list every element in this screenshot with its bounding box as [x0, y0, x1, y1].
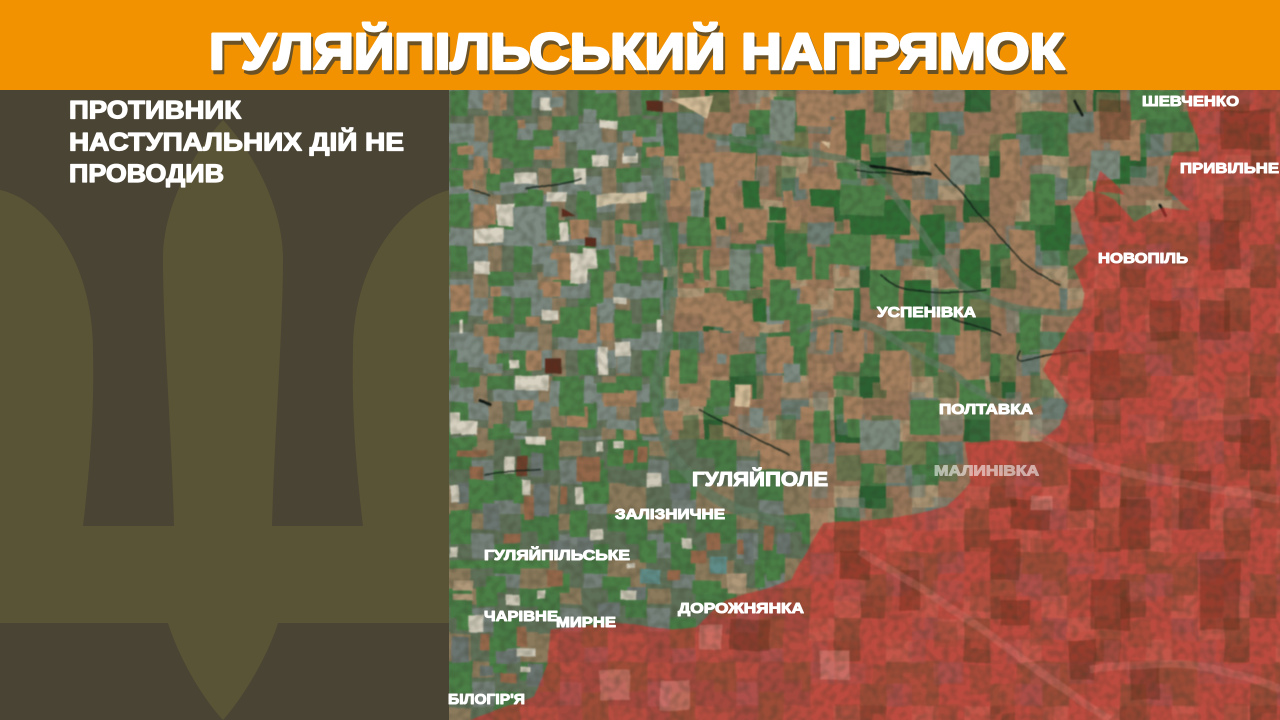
map labels: УСПЕНІВКА: [877, 304, 976, 321]
fields: upper-left base: [449, 90, 664, 442]
map labels: ГУЛЯЙПІЛЬСЬКЕ: [484, 546, 630, 564]
map labels: БІЛОГІР'Я: [448, 691, 525, 708]
map labels: ШЕВЧЕНКО: [1142, 93, 1239, 110]
map labels: ЗАЛІЗНИЧНЕ: [615, 506, 725, 523]
rivers and ravines: [470, 100, 1165, 525]
text: situation summary: ПРОТИВНИК: [69, 96, 242, 124]
text: situation summary: ПРОВОДИВ: [69, 160, 224, 188]
map labels: ДОРОЖНЯНКА: [678, 600, 804, 617]
map labels: ЧАРІВНЕ: [484, 608, 558, 625]
map labels: НОВОПІЛЬ: [1098, 250, 1188, 267]
header bar: [0, 0, 1280, 90]
fields: right-of-centre block: [730, 90, 1180, 470]
fields: lower-left mosaic: [450, 440, 790, 693]
icon: trident emblem: [0, 120, 450, 720]
map labels: МИРНЕ: [556, 614, 616, 631]
zone: red occupied territory: [440, 60, 1280, 720]
map: satellite view: [425, 60, 1280, 720]
map labels: МАЛИНІВКА: [934, 462, 1039, 480]
map labels: [448, 93, 1279, 708]
red zone field tones: [600, 100, 1280, 720]
map labels: ГУЛЯЙПОЛЕ: [692, 467, 828, 491]
title: ГУЛЯЙПІЛЬСЬКИЙ НАПРЯМОК: [209, 22, 1065, 80]
text: situation summary: НАСТУПАЛЬНИХ ДІЙ НЕ: [69, 126, 404, 156]
fields: upper-left mosaic: [450, 93, 663, 447]
fields: lower-left base: [430, 440, 810, 720]
panel: left background: [0, 90, 450, 720]
fields: upper-centre mosaic: [663, 93, 870, 450]
text: situation summary: [69, 96, 404, 188]
map labels: ПРИВІЛЬНЕ: [1180, 160, 1279, 177]
map labels: ПОЛТАВКА: [939, 401, 1033, 418]
